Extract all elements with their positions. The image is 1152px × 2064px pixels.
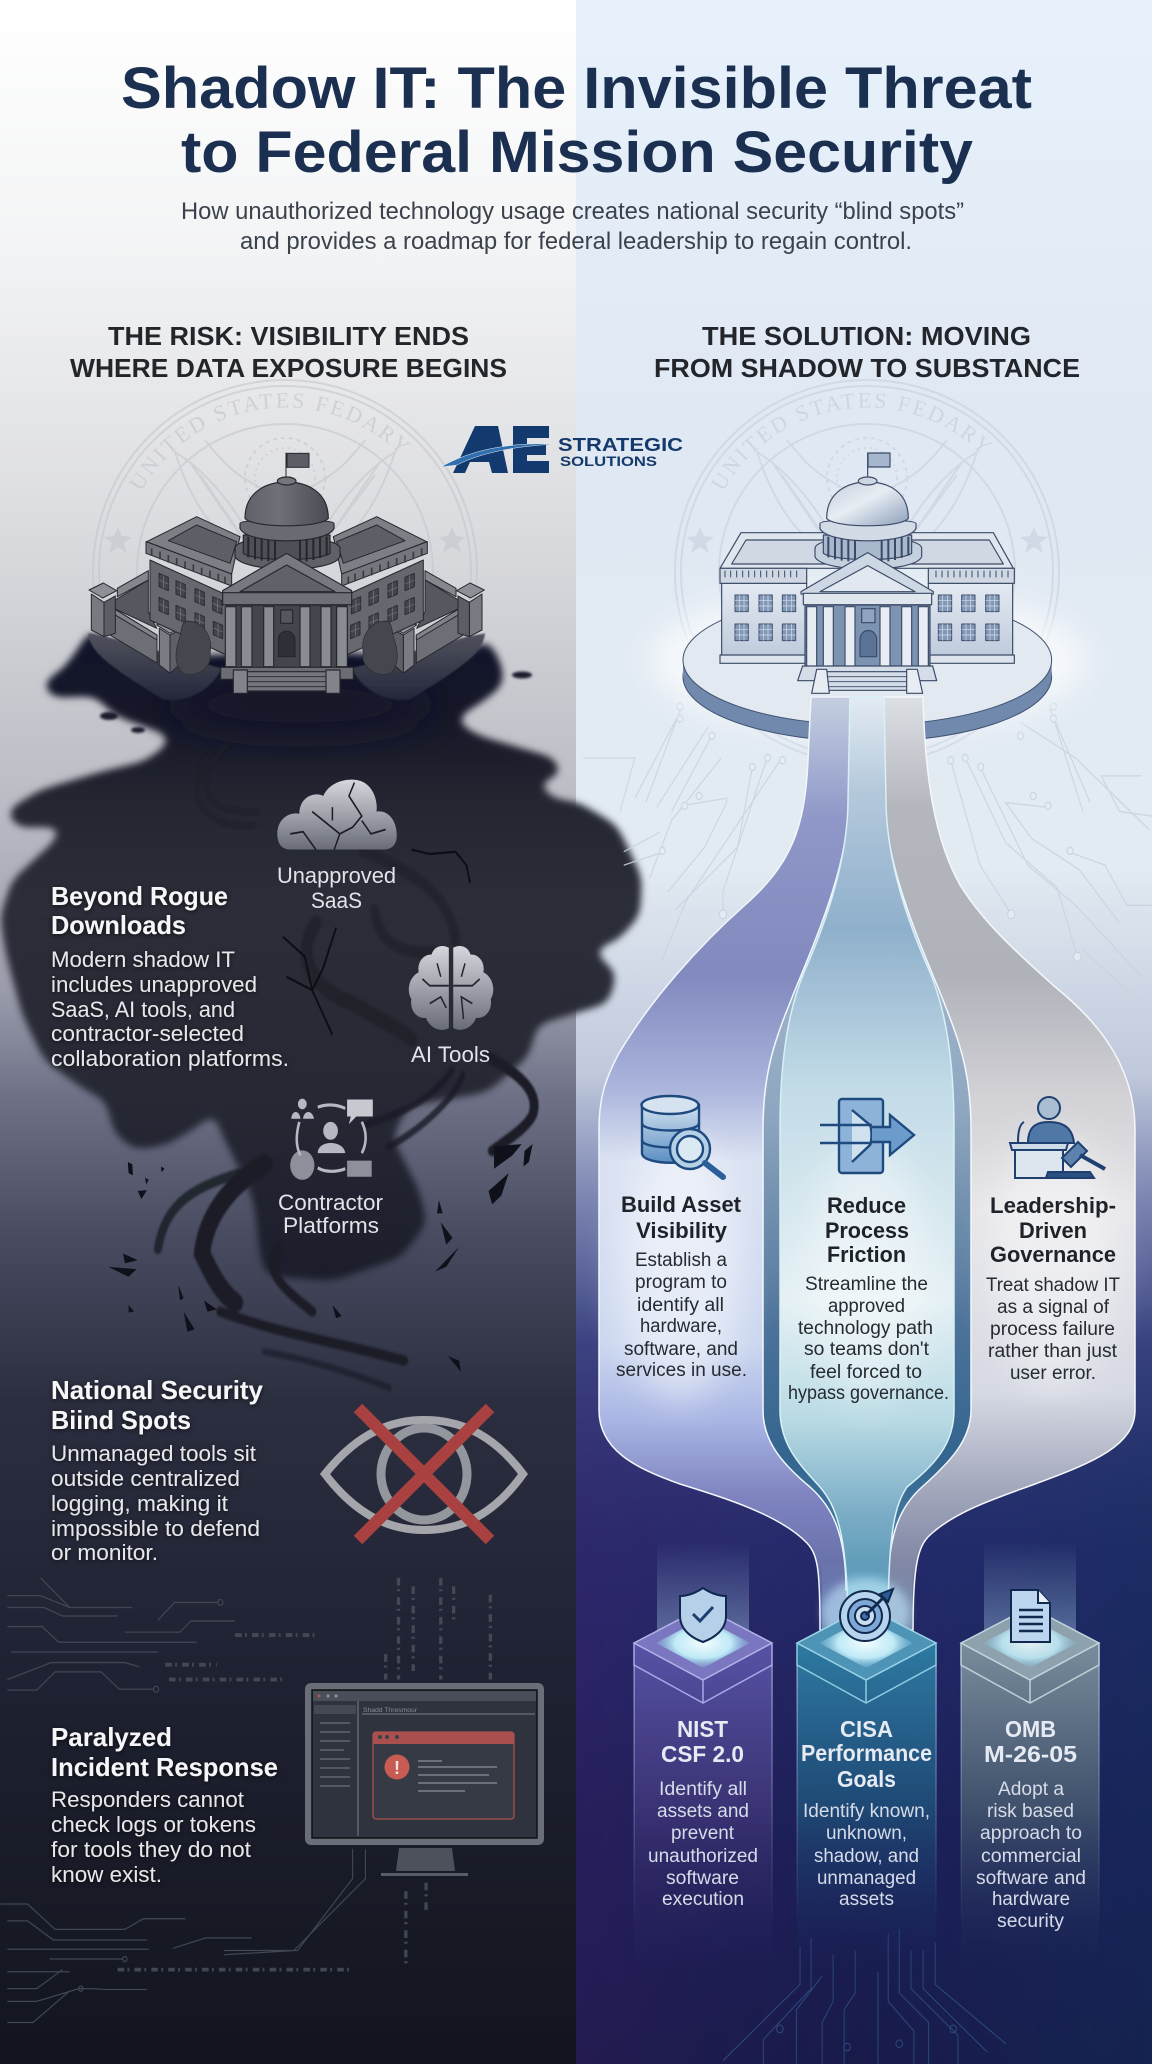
pillar heading bbox=[661, 1716, 744, 1767]
label: contractor platforms: Platforms bbox=[283, 1213, 379, 1238]
body bbox=[986, 1275, 1120, 1384]
ribbon: left path bbox=[599, 697, 866, 1630]
text block: national security blind spots: Unmanaged tools sit bbox=[51, 1441, 256, 1466]
text block: paralyzed incident response: Incident Response bbox=[51, 1752, 278, 1782]
subtitle: and provides a roadmap for federal leadership to regain control. bbox=[240, 228, 912, 255]
text block: beyond rogue downloads: Downloads bbox=[51, 910, 186, 940]
heading: Driven bbox=[1019, 1218, 1087, 1243]
text block: beyond rogue downloads: Beyond Rogue bbox=[51, 881, 228, 911]
text block: paralyzed incident response bbox=[51, 1722, 278, 1887]
text block: beyond rogue downloads: Modern shadow IT bbox=[51, 947, 235, 972]
background: right solution side bbox=[576, 0, 1152, 2064]
pillar body bbox=[648, 1779, 758, 1910]
body: as a signal of bbox=[997, 1297, 1110, 1318]
text block: beyond rogue downloads bbox=[51, 881, 289, 1071]
text block: national security blind spots: logging, making it bbox=[51, 1491, 228, 1516]
label: unapproved saas bbox=[277, 863, 396, 913]
body: technology path bbox=[798, 1318, 933, 1339]
body: user error. bbox=[1010, 1363, 1096, 1384]
panel: reduce process friction bbox=[788, 1099, 949, 1404]
panel: build asset visibility bbox=[616, 1096, 747, 1381]
ribbon: middle outer band bbox=[763, 697, 971, 1590]
pillar body: assets and bbox=[657, 1801, 749, 1822]
text block: paralyzed incident response: check logs or tokens bbox=[51, 1812, 256, 1837]
heading: the solution: FROM SHADOW TO SUBSTANCE bbox=[654, 353, 1080, 383]
bottom circuit traces bbox=[723, 1929, 1006, 2064]
body bbox=[616, 1250, 747, 1381]
ink spill bbox=[0, 625, 642, 1387]
body: approved bbox=[828, 1296, 905, 1317]
body: hardware, bbox=[640, 1316, 722, 1337]
icon: shield bbox=[680, 1588, 726, 1642]
pillar body: approach to bbox=[980, 1823, 1082, 1844]
text block: national security blind spots: Biind Spots bbox=[51, 1405, 191, 1435]
label: ai tools: AI Tools bbox=[411, 1042, 490, 1067]
heading: the risk: WHERE DATA EXPOSURE BEGINS bbox=[70, 353, 507, 383]
logo: AE Strategic Solutions: STRATEGIC bbox=[558, 435, 683, 455]
pillar heading: M-26-05 bbox=[984, 1741, 1077, 1767]
pillar: OMB M-26-05 bbox=[960, 1540, 1100, 1973]
seal watermark: left: UNITED STATES FEDARY bbox=[129, 393, 410, 488]
pillar body: hardware bbox=[992, 1889, 1070, 1910]
pillar body: Identify known, bbox=[803, 1801, 930, 1822]
body: services in use. bbox=[616, 1360, 747, 1381]
text block: beyond rogue downloads: SaaS, AI tools, and bbox=[51, 997, 235, 1022]
label: contractor platforms: Contractor bbox=[278, 1190, 383, 1215]
pillar body: assets bbox=[839, 1889, 894, 1910]
body: program to bbox=[635, 1272, 727, 1293]
seal watermark: right: UNITED STATES FEDARY bbox=[711, 393, 992, 488]
ink droplets bbox=[100, 672, 532, 733]
pillar body: Adopt a bbox=[998, 1779, 1064, 1800]
text block: national security blind spots bbox=[51, 1375, 264, 1565]
pillar body: software bbox=[666, 1868, 739, 1889]
pillar heading: OMB bbox=[1005, 1716, 1056, 1742]
body: feel forced to bbox=[810, 1362, 922, 1383]
text block: beyond rogue downloads: collaboration platforms. bbox=[51, 1046, 289, 1071]
ribbon: right path bbox=[866, 697, 1135, 1630]
pillar: NIST CSF 2.0 bbox=[634, 1540, 773, 1973]
text block: beyond rogue downloads: includes unapproved bbox=[51, 972, 257, 997]
title: Shadow IT: The Invisible Threat bbox=[121, 56, 1032, 121]
label: unapproved saas: Unapproved bbox=[277, 863, 396, 888]
text block: beyond rogue downloads: contractor-selected bbox=[51, 1021, 244, 1046]
body: Establish a bbox=[635, 1250, 727, 1271]
icon: target with dart bbox=[840, 1589, 893, 1641]
icon: leader at podium with gavel bbox=[1010, 1097, 1105, 1178]
heading: Process bbox=[825, 1218, 909, 1243]
ink shards bbox=[108, 1144, 533, 1372]
body: Streamline the bbox=[805, 1274, 928, 1295]
heading: the risk bbox=[70, 321, 507, 383]
body: identify all bbox=[637, 1295, 724, 1316]
icon: contractor platforms bbox=[290, 1099, 373, 1180]
flag bbox=[868, 453, 890, 477]
pillar body: execution bbox=[662, 1889, 744, 1910]
pillar body: software and bbox=[976, 1868, 1086, 1889]
subtitle: How unauthorized technology usage creates national security “blind spots” bbox=[181, 198, 964, 225]
text block: national security blind spots: or monitor. bbox=[51, 1540, 158, 1565]
right circuit traces bbox=[583, 703, 1152, 1004]
pillar heading: NIST bbox=[677, 1716, 728, 1742]
pillar body: security bbox=[997, 1911, 1065, 1932]
icon: document bbox=[1011, 1590, 1050, 1642]
heading: Leadership- bbox=[990, 1193, 1116, 1218]
label: contractor platforms bbox=[278, 1190, 383, 1238]
pillar body bbox=[976, 1779, 1086, 1932]
seal watermark: left bbox=[92, 379, 478, 587]
heading: Build Asset bbox=[621, 1192, 742, 1217]
title bbox=[121, 56, 1032, 185]
pillar heading: CSF 2.0 bbox=[661, 1741, 744, 1767]
icon: crossed-out eye bbox=[325, 1408, 523, 1540]
icon: monitor with alert: ! bbox=[394, 1758, 400, 1778]
background: left risk side bbox=[0, 0, 576, 2064]
logo: AE Strategic Solutions: SOLUTIONS bbox=[560, 453, 657, 469]
pillar body: shadow, and bbox=[814, 1846, 919, 1867]
panel: leadership-driven governance bbox=[986, 1097, 1120, 1384]
pillar body: unauthorized bbox=[648, 1846, 758, 1867]
icon: cracked cloud bbox=[277, 780, 397, 850]
pillar body: prevent bbox=[671, 1823, 735, 1844]
icon: database and magnifier bbox=[642, 1096, 723, 1177]
platform glow bbox=[648, 590, 1088, 730]
pillar heading: CISA bbox=[840, 1716, 893, 1742]
flag bbox=[286, 453, 309, 477]
heading: Reduce bbox=[827, 1193, 906, 1218]
pillar body: unmanaged bbox=[817, 1868, 916, 1889]
body: Treat shadow IT bbox=[986, 1275, 1120, 1296]
text block: paralyzed incident response: for tools they do not bbox=[51, 1837, 251, 1862]
left circuit traces bbox=[0, 1578, 490, 2023]
seal watermark: right bbox=[674, 379, 1060, 756]
label: unapproved saas: SaaS bbox=[311, 888, 362, 913]
building: fortified federal building (risk) bbox=[88, 453, 485, 700]
heading bbox=[825, 1193, 909, 1267]
logo: AE Strategic Solutions bbox=[441, 426, 683, 473]
body: software, and bbox=[624, 1339, 738, 1360]
text block: paralyzed incident response: Paralyzed bbox=[51, 1722, 172, 1752]
pillar body: commercial bbox=[981, 1846, 1081, 1867]
heading bbox=[990, 1193, 1116, 1267]
building: federal building (solution) bbox=[720, 453, 1014, 693]
pillar heading: Performance bbox=[801, 1740, 932, 1766]
text block: national security blind spots: outside centralized bbox=[51, 1466, 240, 1491]
heading: Friction bbox=[827, 1242, 906, 1267]
body: process failure bbox=[990, 1319, 1115, 1340]
platform bbox=[683, 595, 1052, 742]
body: so teams don't bbox=[804, 1339, 930, 1360]
pillar body: risk based bbox=[987, 1801, 1074, 1822]
heading: the solution: THE SOLUTION: MOVING bbox=[702, 321, 1031, 351]
heading bbox=[621, 1192, 742, 1243]
body: hypass governance. bbox=[788, 1383, 949, 1404]
ribbon: middle inner panel bbox=[780, 697, 954, 1630]
pillar: CISA Performance Goals bbox=[796, 1560, 937, 1973]
heading: the risk: THE RISK: VISIBILITY ENDS bbox=[108, 321, 469, 351]
pillar heading: Goals bbox=[837, 1766, 896, 1792]
ink tendrils bbox=[158, 745, 534, 1387]
title: to Federal Mission Security bbox=[181, 120, 973, 185]
icon: monitor with alert bbox=[305, 1683, 544, 1876]
text block: paralyzed incident response: know exist. bbox=[51, 1862, 162, 1887]
body bbox=[788, 1274, 949, 1404]
pillar heading bbox=[984, 1716, 1077, 1767]
text block: national security blind spots: impossible to defend bbox=[51, 1516, 260, 1541]
body: rather than just bbox=[988, 1341, 1118, 1362]
pillar body: unknown, bbox=[826, 1823, 907, 1844]
pillar body: Identify all bbox=[659, 1779, 747, 1800]
heading: the solution bbox=[654, 321, 1080, 383]
icon: monitor with alert: Shadd Thresmour bbox=[363, 1707, 418, 1714]
pillar body bbox=[803, 1801, 930, 1910]
subtitle bbox=[181, 198, 964, 255]
icon: brain bbox=[409, 946, 493, 1030]
heading: Governance bbox=[990, 1242, 1116, 1267]
text block: national security blind spots: National Security bbox=[51, 1375, 264, 1405]
pillar heading bbox=[801, 1716, 932, 1792]
icon: arrow through gate bbox=[820, 1099, 914, 1173]
heading: Visibility bbox=[636, 1218, 728, 1243]
ink cracks bbox=[283, 850, 470, 1035]
text block: paralyzed incident response: Responders cannot bbox=[51, 1787, 244, 1812]
